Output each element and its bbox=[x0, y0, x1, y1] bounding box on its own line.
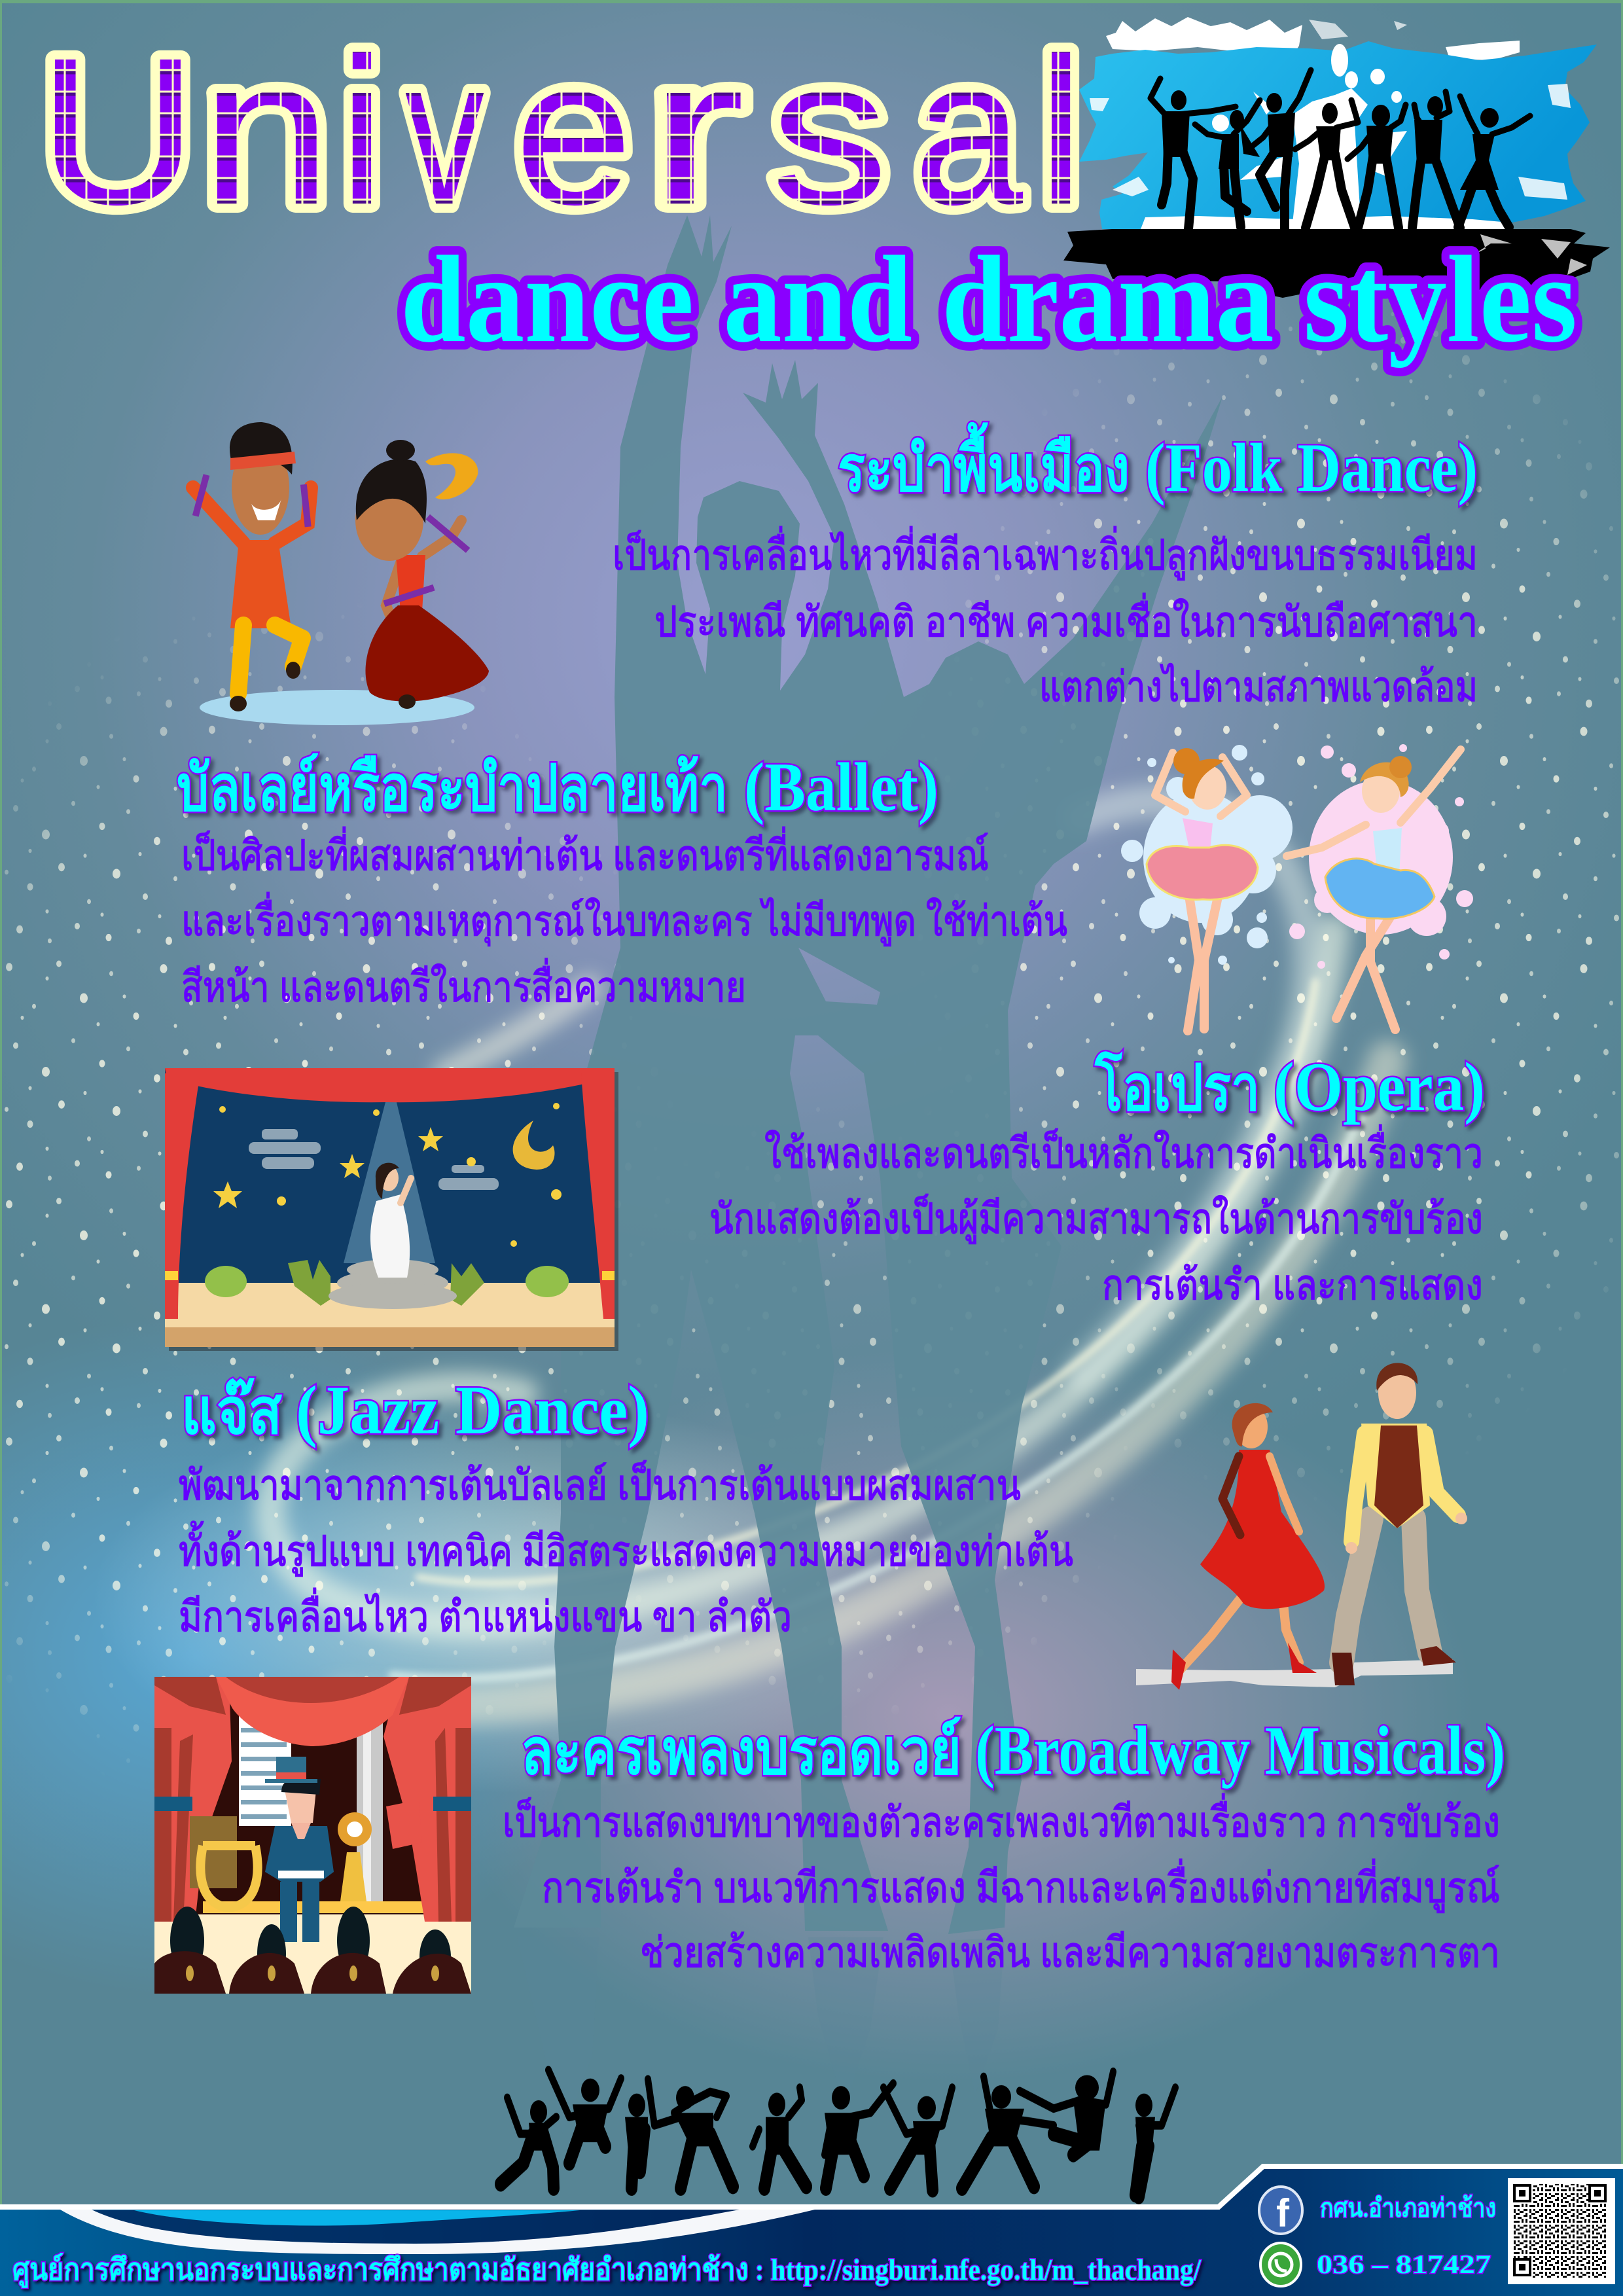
text: opera: การเต้นรำ และการแสดง bbox=[1102, 1261, 1483, 1308]
title: Universal: s bbox=[770, 14, 889, 248]
title: Universal: a bbox=[914, 14, 1024, 248]
heading: folk dance: (Folk Dance) bbox=[1145, 429, 1478, 506]
heading: ballet: (Ballet) bbox=[744, 749, 938, 825]
heading: broadway musicals: ละครเพลงบรอดเวย์ bbox=[521, 1716, 961, 1788]
illustration: jazz dancers bbox=[1136, 1363, 1467, 1690]
footer address text: ศูนย์การศึกษานอกระบบและการศึกษาตามอัธยาศัยอำเภอท่าช้าง : http://singburi.nfe.go.th/m_thachang/ bbox=[12, 2252, 1202, 2288]
text: broadway musicals bbox=[503, 1793, 1500, 1976]
icon: facebook bbox=[1259, 2187, 1302, 2235]
text: folk dance: แตกต่างไปตามสภาพแวดล้อม bbox=[1039, 663, 1478, 710]
heading: opera: (Opera) bbox=[1274, 1049, 1485, 1125]
heading: opera: โอเปรา bbox=[1094, 1051, 1260, 1124]
illustration: ballerinas bbox=[1121, 744, 1473, 1031]
heading: jazz dance: (Jazz Dance) bbox=[296, 1372, 649, 1448]
title: Universal: e bbox=[514, 14, 633, 248]
title: Universal: i bbox=[338, 14, 385, 248]
bottom silhouettes of dancers bbox=[501, 2070, 1175, 2197]
text: ballet: และเรื่องราวตามเหตุการณ์ในบทละคร ไม่มีบทพูด ใช้ท่าเต้น bbox=[181, 892, 1067, 946]
heading: ballet: บัลเลย์หรือระบำปลายเท้า bbox=[177, 753, 728, 825]
subtitle: dance and drama styles: dance and drama styles bbox=[401, 231, 1577, 368]
text: folk dance: ประเพณี ทัศนคติ อาชีพ ความเชื่อในการนับถือศาสนา bbox=[654, 593, 1478, 645]
text: opera bbox=[709, 1124, 1483, 1308]
text: ballet bbox=[181, 827, 1067, 1011]
large background dancers silhouette bbox=[514, 215, 1222, 2134]
icon: phone bbox=[1260, 2243, 1301, 2286]
title: Universal: n bbox=[201, 14, 332, 248]
title: Universal bbox=[38, 14, 1084, 248]
light swirl and sparkles bbox=[5, 312, 1619, 1792]
phone number: 036 – 817427 bbox=[1317, 2250, 1491, 2279]
facebook page name: กศน.อำเภอท่าช้าง bbox=[1320, 2193, 1496, 2223]
text: broadway musicals: การเต้นรำ บนเวทีการแสดง มีฉากและเครื่องแต่งกายที่สมบูรณ์ bbox=[542, 1859, 1500, 1913]
text: folk dance bbox=[613, 526, 1478, 710]
text: ballet: สีหน้า และดนตรีในการสื่อความหมาย bbox=[181, 958, 746, 1011]
title: Universal: l bbox=[1037, 14, 1084, 248]
title: Universal: r bbox=[647, 14, 745, 248]
title: Universal: U bbox=[38, 14, 198, 248]
header illustration: dancers on paint splash bbox=[1063, 17, 1610, 298]
text: folk dance: เป็นการเคลื่อนไหวที่มีลีลาเฉพาะถิ่นปลูกฝังขนบธรรมเนียม bbox=[613, 526, 1478, 581]
footer band bbox=[0, 2166, 1623, 2296]
text: jazz dance bbox=[179, 1461, 1073, 1640]
illustration: opera stage bbox=[165, 1068, 618, 1351]
heading: opera bbox=[1094, 1049, 1485, 1125]
heading: broadway musicals bbox=[521, 1712, 1505, 1789]
title: Universal: v bbox=[405, 14, 484, 248]
text: ballet: เป็นศิลปะที่ผสมผสานท่าเต้น และดนตรีที่แสดงอารมณ์ bbox=[181, 827, 989, 879]
icon: facebook: f bbox=[1276, 2191, 1290, 2235]
illustration: broadway stage bbox=[154, 1677, 471, 1994]
text: jazz dance: พัฒนามาจากการเต้นบัลเลย์ เป็นการเต้นแบบผสมผสาน bbox=[179, 1461, 1021, 1509]
heading: folk dance bbox=[838, 422, 1478, 506]
text: jazz dance: ทั้งด้านรูปแบบ เทคนิค มีอิสตระแสดงความหมายของท่าเต้น bbox=[179, 1521, 1073, 1577]
heading: folk dance: ระบำพื้นเมือง bbox=[838, 422, 1130, 505]
text: opera: ใช้เพลงและดนตรีเป็นหลักในการดำเนินเรื่องราว bbox=[764, 1124, 1483, 1177]
text: jazz dance: มีการเคลื่อนไหว ตำแหน่งแขน ขา ลำตัว bbox=[179, 1588, 792, 1640]
heading: jazz dance: แจ๊ส bbox=[181, 1377, 282, 1448]
illustration: folk dancers bbox=[192, 422, 489, 725]
heading: broadway musicals: (Broadway Musicals) bbox=[975, 1712, 1505, 1789]
QR code bbox=[1508, 2178, 1615, 2284]
text: opera: นักแสดงต้องเป็นผู้มีความสามารถในด้านการขับร้อง bbox=[709, 1194, 1483, 1244]
